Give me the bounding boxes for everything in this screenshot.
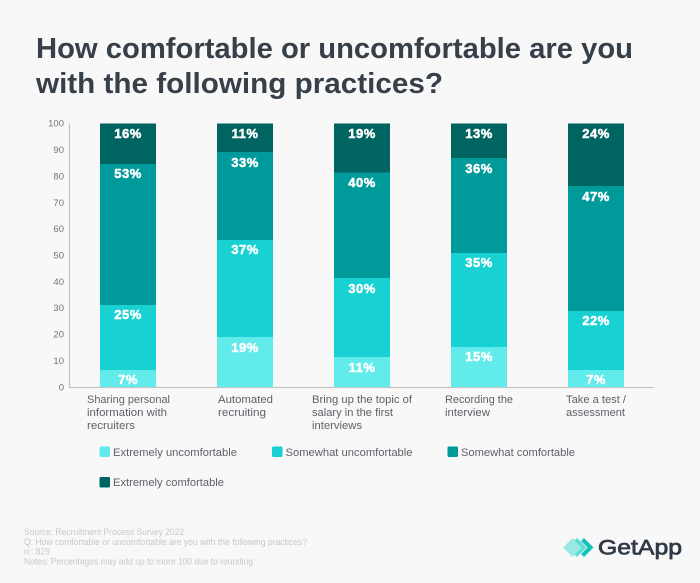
- title: How comfortable or uncomfortable are you: [36, 33, 633, 65]
- category labels: Take a test /: [566, 394, 627, 406]
- source notes: Q: How comfortable or uncomfortable are you with the following practices?: [24, 537, 307, 547]
- bar: Recording the interview: [451, 124, 507, 387]
- category labels: recruiting: [218, 407, 266, 419]
- bar: Bring up the topic of salary: 11%: [349, 360, 375, 375]
- legend: Extremely comfortable: [113, 477, 224, 489]
- y axis labels: 80: [53, 172, 64, 182]
- category labels: salary in the first: [312, 407, 393, 419]
- icon: logo diamonds: [563, 538, 594, 557]
- bar: Sharing personal information with recruiters: 16%: [114, 126, 142, 141]
- category labels: assessment: [566, 407, 625, 419]
- y axis labels: 0: [59, 382, 64, 394]
- category labels: information with: [87, 407, 167, 419]
- bar: Take a test / assessment: [568, 124, 624, 387]
- title: [35, 33, 633, 100]
- category labels: Automated: [218, 394, 273, 406]
- y axis labels: 90: [53, 145, 64, 156]
- bar: Sharing personal information with recruiters: 7%: [118, 372, 138, 387]
- y axis labels: 50: [53, 250, 64, 262]
- category labels: Sharing personal: [87, 394, 170, 406]
- bar: Automated recruiting: 37%: [231, 242, 259, 257]
- legend: Somewhat uncomfortable: [286, 447, 412, 459]
- source notes: [24, 527, 307, 566]
- category labels: recruiters: [87, 420, 136, 432]
- category labels: [87, 394, 627, 432]
- bar: Recording the interview: 36%: [465, 161, 493, 176]
- bar: Sharing personal information with recruiters: 25%: [114, 307, 142, 322]
- bar: Recording the interview: 13%: [465, 126, 493, 141]
- source notes: n:: 829: [24, 546, 50, 556]
- axes: [70, 124, 654, 388]
- y axis labels: 40: [53, 277, 64, 288]
- legend: [100, 446, 575, 489]
- bar: Automated recruiting: 11%: [232, 126, 258, 141]
- bar: Sharing personal information with recruiters: 53%: [114, 166, 142, 181]
- source notes: Notes: Percentages may add up to more 100 due to rounding: [24, 556, 253, 566]
- bar: Bring up the topic of salary: [334, 124, 390, 387]
- bar: Take a test / assessment: 24%: [582, 126, 610, 141]
- source notes: Source: Recruitment Process Survey 2022: [24, 527, 184, 537]
- legend: Extremely uncomfortable: [113, 447, 237, 459]
- y axis labels: [48, 118, 64, 394]
- bar: Take a test / assessment: 22%: [582, 313, 610, 328]
- category labels: interview: [445, 407, 490, 419]
- y axis labels: 70: [53, 198, 64, 209]
- bar: Bring up the topic of salary: 30%: [348, 281, 376, 296]
- category labels: interviews: [312, 420, 363, 432]
- GetApp logo: [563, 536, 682, 560]
- y axis labels: 10: [53, 356, 64, 367]
- bar: Take a test / assessment: 47%: [582, 189, 610, 204]
- y axis labels: 100: [48, 118, 64, 130]
- y axis labels: 30: [53, 303, 64, 314]
- bar: Bring up the topic of salary: 40%: [348, 175, 376, 190]
- bar: Sharing personal information with recruiters: [100, 124, 156, 387]
- bar: Recording the interview: 35%: [465, 255, 493, 270]
- y axis labels: 20: [53, 330, 64, 340]
- legend: Somewhat comfortable: [461, 447, 575, 459]
- bar: Bring up the topic of salary: 19%: [348, 126, 376, 141]
- bar: Automated recruiting: 33%: [231, 155, 259, 170]
- bar: Take a test / assessment: 7%: [586, 372, 606, 387]
- bar: Recording the interview: 15%: [465, 349, 493, 364]
- category labels: Bring up the topic of: [312, 394, 413, 406]
- title: with the following practices?: [35, 68, 443, 100]
- y axis labels: 60: [53, 224, 64, 235]
- bar: Automated recruiting: [217, 124, 273, 387]
- bar: Automated recruiting: 19%: [231, 340, 259, 355]
- logo wordmark: GetApp: [598, 536, 682, 560]
- category labels: Recording the: [445, 394, 513, 406]
